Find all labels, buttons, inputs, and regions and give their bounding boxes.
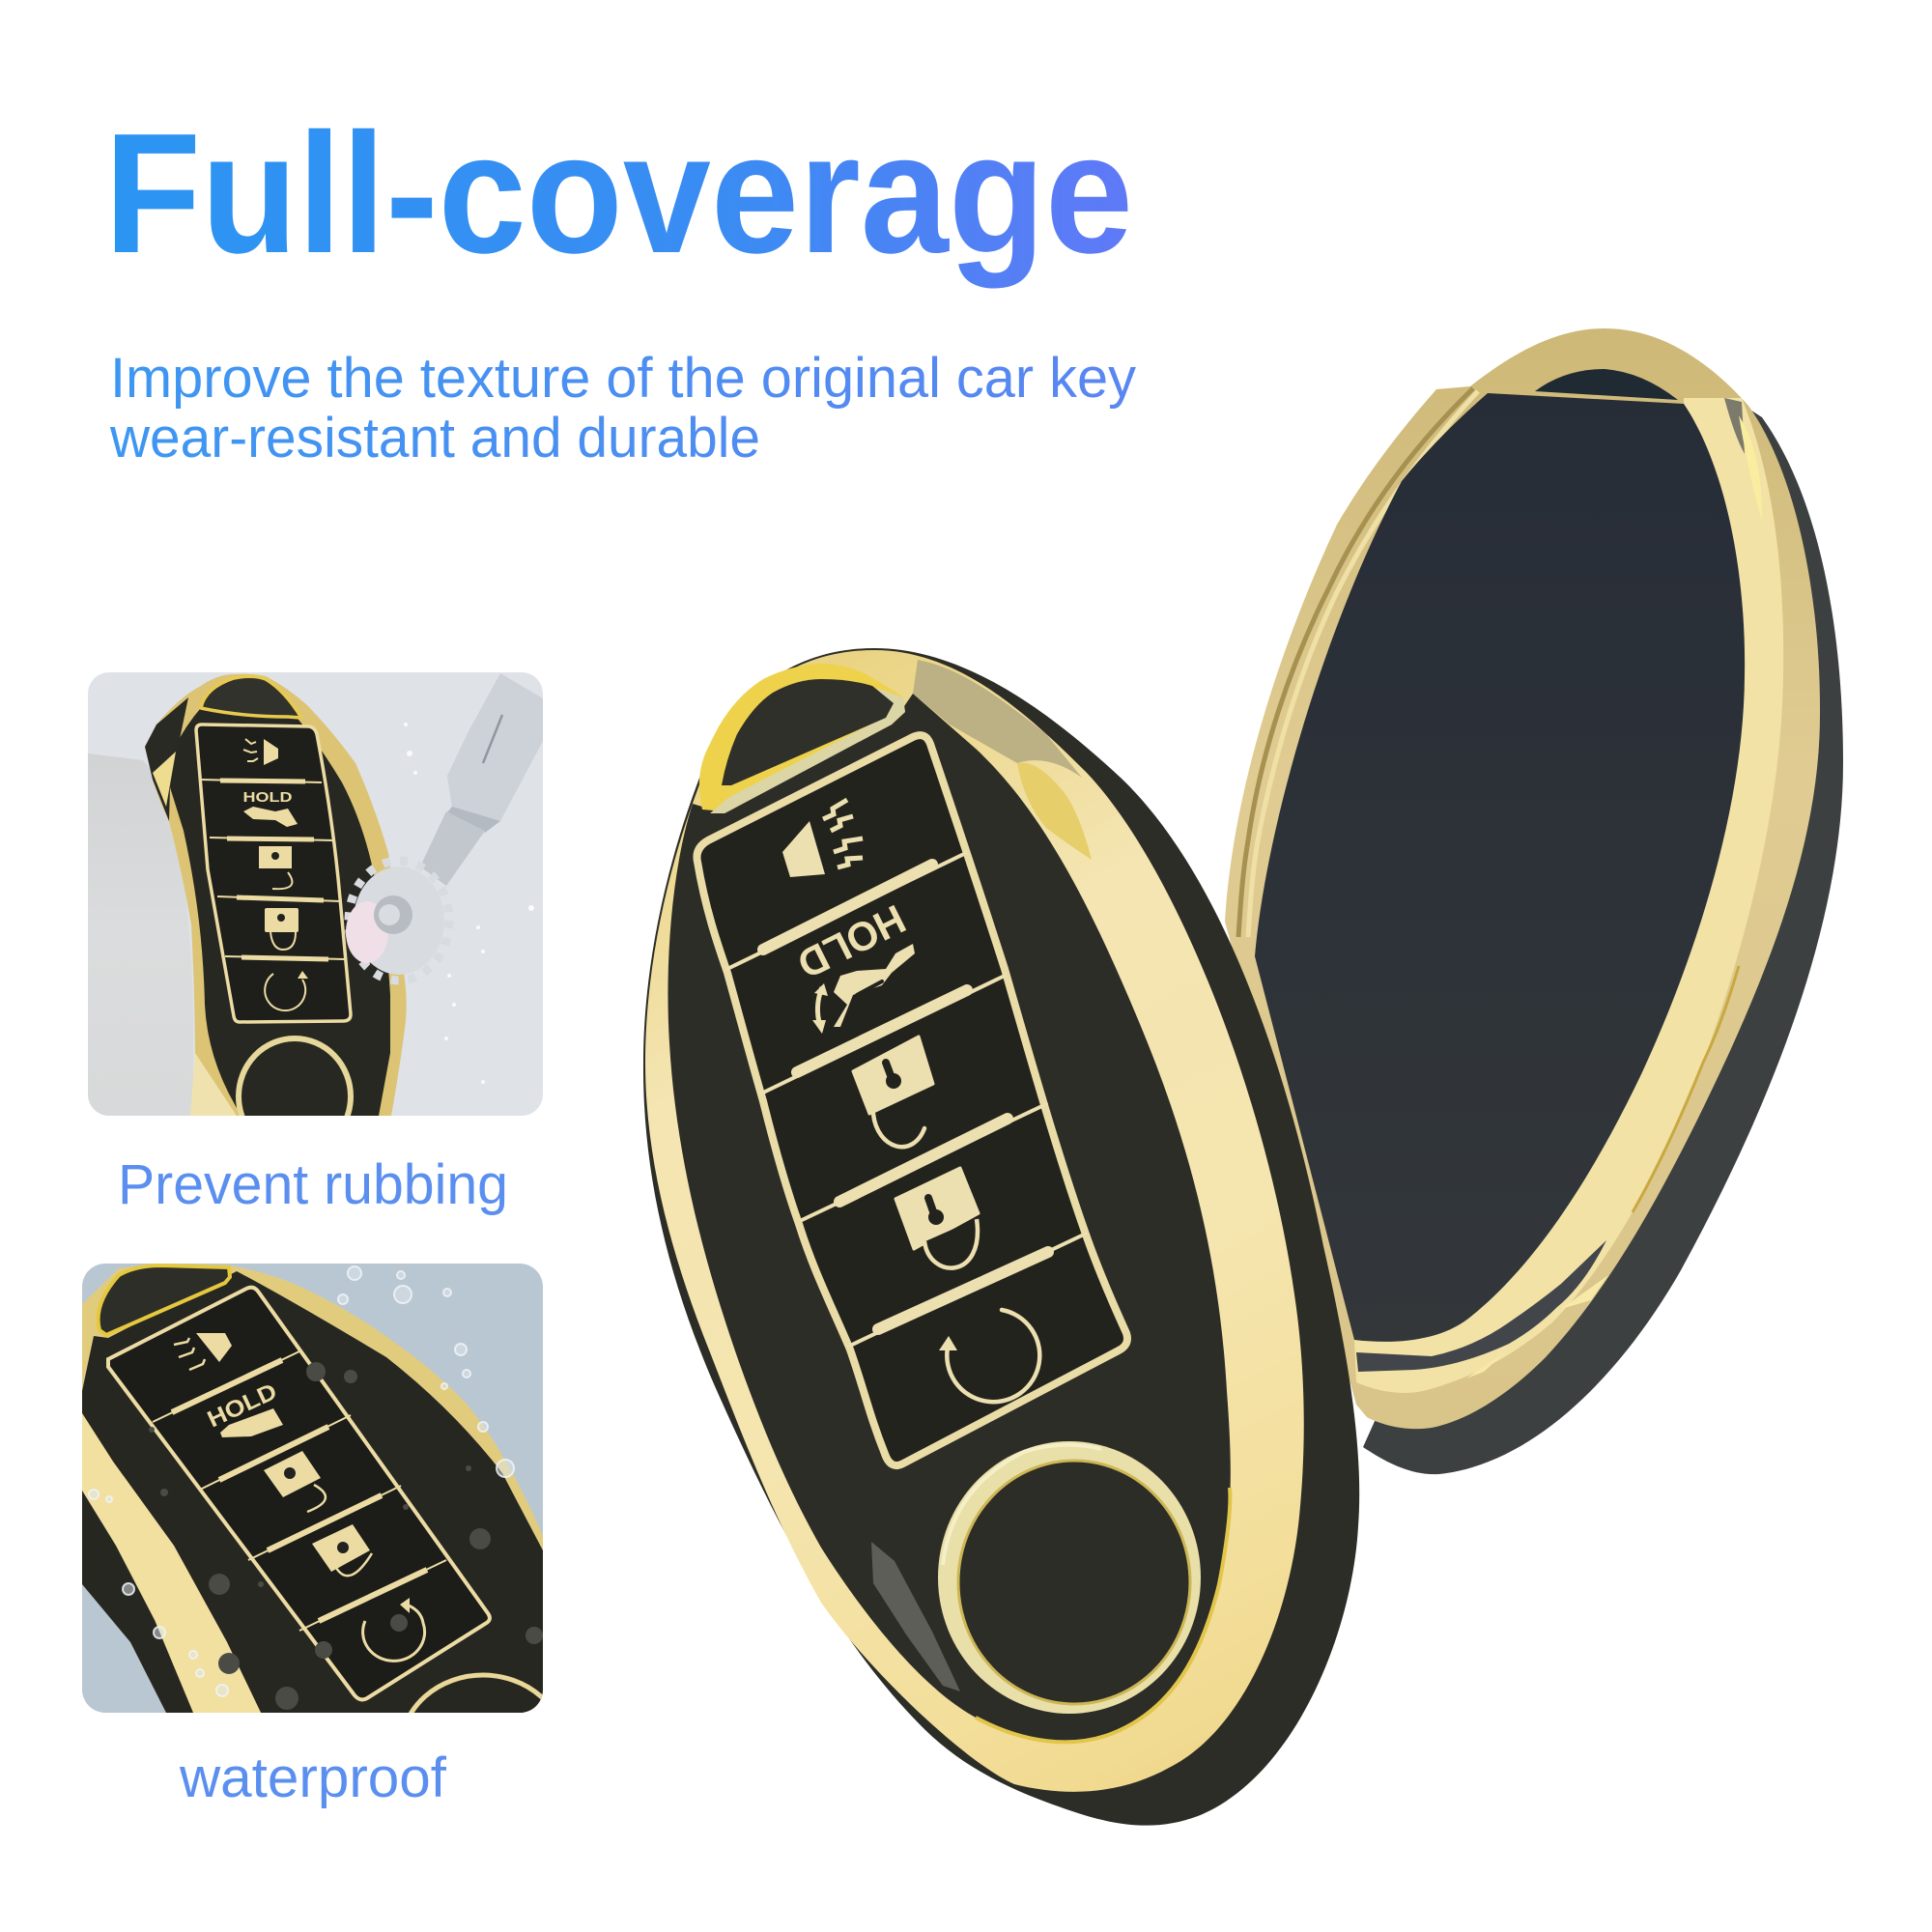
case top recess xyxy=(1535,369,1678,400)
home circle button xyxy=(938,1441,1201,1714)
button dividers xyxy=(727,853,1086,1346)
left band line xyxy=(1238,388,1473,937)
rotary cutter tool xyxy=(346,673,543,980)
thumbnail key body xyxy=(145,674,407,1116)
top cap window xyxy=(699,664,905,811)
thumbnail button panel xyxy=(108,1288,490,1699)
back case xyxy=(1225,328,1843,1474)
main key fob xyxy=(643,648,1359,1826)
sparks xyxy=(404,723,534,1084)
key gold rim xyxy=(645,650,1304,1792)
white car surface xyxy=(88,753,193,1116)
thumbnail button panel: HOLD xyxy=(204,1378,281,1433)
label: prevent rubbing: Prevent rubbing xyxy=(118,1153,508,1216)
bright gold highlight xyxy=(1017,762,1092,860)
icon: hold trunk xyxy=(790,896,915,1034)
thumbnail home circle xyxy=(236,1036,354,1116)
translucent gold top xyxy=(913,660,1082,778)
icon: lock xyxy=(895,1168,979,1268)
panel: prevent rubbing photo xyxy=(88,672,543,1154)
key dark body xyxy=(643,648,1359,1826)
water droplets on dark face xyxy=(149,1362,543,1710)
icon: hold trunk: HOLD xyxy=(790,896,913,987)
thumbnail button panel xyxy=(196,724,351,1022)
case inner panel xyxy=(1255,393,1745,1342)
subtitle text block: Improve the texture of the original car key xyxy=(110,347,1136,410)
water droplets on background and gold xyxy=(89,1266,514,1696)
lower dark reflection xyxy=(1356,1240,1606,1372)
title: Full-coverage xyxy=(104,98,1133,289)
panel: waterproof photo xyxy=(82,1264,543,1713)
glossy reflection xyxy=(871,1542,960,1691)
button panel xyxy=(696,735,1127,1465)
icon: unlock xyxy=(853,1037,933,1147)
subtitle text block xyxy=(109,347,1136,469)
icon: speaker xyxy=(782,800,863,877)
subtitle text block: wear-resistant and durable xyxy=(109,407,760,469)
cap window xyxy=(99,1265,230,1335)
thumbnail home ring xyxy=(408,1673,543,1713)
key black face xyxy=(668,694,1231,1742)
cap window xyxy=(201,676,301,718)
icon: remote start arrow xyxy=(939,1310,1039,1402)
gold bright band xyxy=(1354,398,1783,1393)
label: waterproof: waterproof xyxy=(179,1747,447,1809)
thumbnail button panel: HOLD xyxy=(243,789,293,806)
thumbnail key body xyxy=(82,1264,543,1713)
back case dark shell xyxy=(1363,396,1843,1474)
inner yellow edge line xyxy=(976,1488,1230,1742)
top right reflection xyxy=(1724,398,1745,454)
back case gold rim xyxy=(1225,328,1820,1429)
